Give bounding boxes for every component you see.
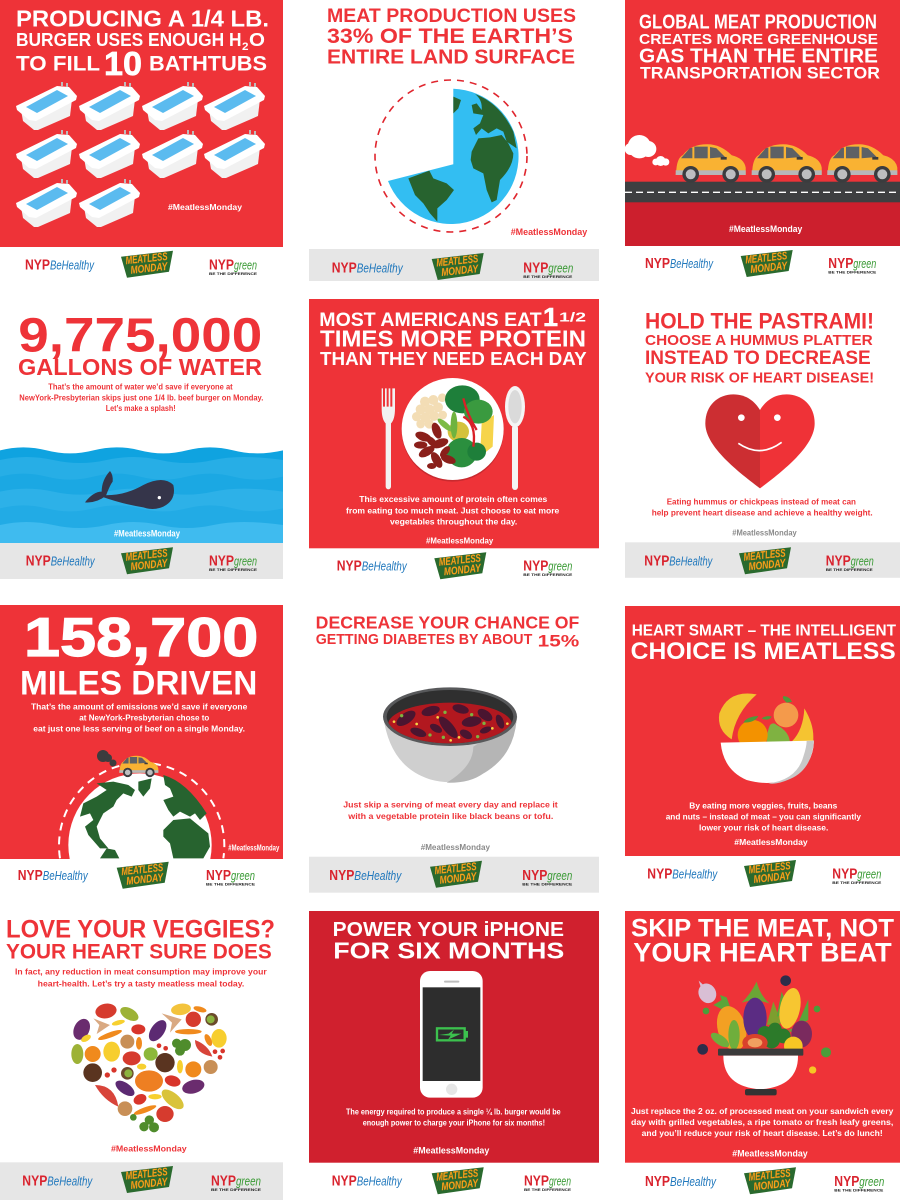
- logo: NYP green: NYP: [523, 260, 548, 277]
- logo: Meatless Monday: MEATLESS: [748, 860, 792, 876]
- logo band: [0, 543, 283, 579]
- hashtag: #MeatlessMonday: [732, 1149, 808, 1159]
- logo: Meatless Monday: MONDAY: [130, 557, 169, 573]
- panel: heart smart: [625, 606, 900, 887]
- logo: NYP BeHealthy: [26, 553, 95, 570]
- logo: NYP green: [523, 558, 572, 577]
- logo: Meatless Monday: [117, 862, 169, 889]
- logo: NYP green: NYP: [524, 1173, 549, 1190]
- heading: LOVE YOUR VEGGIES?: [6, 916, 275, 943]
- logo: NYP green: [209, 256, 257, 276]
- logo: Meatless Monday: MEATLESS: [745, 250, 788, 266]
- hashtag: #MeatlessMonday: [111, 1144, 187, 1154]
- logo: NYP green: green: [851, 555, 874, 569]
- heading: ENTIRE LAND SURFACE: [327, 46, 575, 68]
- body text: heart-health. Let’s try a tasty meatless meal today.: [38, 978, 244, 988]
- logo: NYP BeHealthy: NYP: [25, 256, 50, 274]
- body text: [631, 1106, 894, 1138]
- body text: Let’s make a splash!: [106, 403, 176, 413]
- logo: NYP green: BE THE DIFFERENCE: [206, 882, 255, 886]
- logo: NYP green: green: [234, 258, 257, 272]
- plate of food: [402, 378, 504, 482]
- logo: NYP green: [828, 255, 876, 274]
- logo: NYP BeHealthy: NYP: [22, 1172, 47, 1189]
- heading: [319, 302, 587, 369]
- logo: NYP green: [211, 1172, 261, 1192]
- logo: NYP BeHealthy: BeHealthy: [669, 555, 713, 569]
- logo: NYP BeHealthy: NYP: [645, 255, 670, 272]
- logo: NYP green: NYP: [522, 867, 547, 884]
- logo: Meatless Monday: MEATLESS: [121, 862, 164, 878]
- hashtag: #MeatlessMonday: [421, 842, 490, 852]
- logo: Meatless Monday: MONDAY: [126, 872, 165, 888]
- logo: Meatless Monday: MEATLESS: [125, 1166, 169, 1182]
- logo: NYP BeHealthy: [22, 1172, 93, 1189]
- logo: NYP green: green: [549, 1175, 571, 1189]
- logo: NYP green: [206, 867, 255, 886]
- logo: NYP BeHealthy: NYP: [332, 1173, 357, 1190]
- panel: gallons of water: [0, 310, 283, 579]
- body text: In fact, any reduction in meat consumption may improve your: [15, 967, 267, 977]
- heading: CHOICE IS MEATLESS: [631, 638, 896, 665]
- logo: NYP BeHealthy: [337, 558, 407, 575]
- logo: NYP green: BE THE DIFFERENCE: [523, 275, 572, 279]
- logo: NYP green: NYP: [834, 1173, 859, 1190]
- panel background: [0, 605, 283, 859]
- logo: NYP green: NYP: [826, 553, 851, 570]
- logo: NYP green: green: [859, 1175, 884, 1189]
- logo: Meatless Monday: [739, 547, 791, 574]
- bathtub pictogram grid: [16, 82, 265, 227]
- fruit bowl: [719, 693, 814, 784]
- body text: [19, 382, 263, 413]
- logo: Meatless Monday: MONDAY: [748, 557, 787, 573]
- logo: NYP BeHealthy: NYP: [644, 553, 669, 570]
- logo: NYP green: [834, 1173, 884, 1192]
- logo: NYP green: green: [853, 257, 876, 271]
- logo: NYP BeHealthy: NYP: [337, 558, 362, 575]
- logo: NYP green: BE THE DIFFERENCE: [826, 568, 873, 572]
- logo: NYP green: green: [236, 1174, 261, 1188]
- logo: Meatless Monday: [744, 860, 796, 887]
- logo: NYP BeHealthy: BeHealthy: [357, 1175, 402, 1189]
- logo: NYP BeHealthy: [329, 867, 402, 884]
- logo: Meatless Monday: MONDAY: [753, 870, 792, 886]
- logo: NYP green: green: [547, 869, 572, 883]
- logo: NYP green: BE THE DIFFERENCE: [211, 1188, 261, 1192]
- hashtag: #MeatlessMonday: [729, 224, 802, 234]
- logo: Meatless Monday: [430, 861, 482, 888]
- logo: Meatless Monday: MEATLESS: [434, 861, 478, 877]
- logo: Meatless Monday: MONDAY: [130, 1176, 169, 1192]
- logo: Meatless Monday: MEATLESS: [125, 251, 169, 267]
- heading: [645, 308, 874, 386]
- globe with dashed orbit: [58, 762, 226, 859]
- three cars: [676, 144, 897, 183]
- logo: NYP green: NYP: [523, 558, 548, 575]
- body text: day with grilled vegetables, a ripe tomato or fresh leafy greens,: [631, 1117, 893, 1127]
- logo: Meatless Monday: MONDAY: [441, 1177, 480, 1193]
- logo: NYP green: NYP: [209, 256, 234, 274]
- body text: [666, 800, 861, 833]
- logo: NYP BeHealthy: NYP: [329, 867, 354, 884]
- heading: CREATES MORE GREENHOUSE: [639, 31, 878, 48]
- heading: POWER YOUR iPHONE: [333, 918, 564, 941]
- heading: GAS THAN THE ENTIRE: [639, 46, 878, 68]
- heading: [316, 612, 580, 651]
- logo: NYP BeHealthy: NYP: [647, 866, 672, 883]
- logo: NYP green: BE THE DIFFERENCE: [832, 881, 881, 885]
- panel background: [0, 0, 283, 247]
- heading: THAN THEY NEED EACH DAY: [320, 349, 587, 369]
- body text: [346, 494, 560, 526]
- logo: NYP green: [523, 260, 573, 279]
- heading: FOR SIX MONTHS: [333, 937, 564, 963]
- ocean waves: [0, 447, 283, 543]
- logo: Meatless Monday: MEATLESS: [436, 1167, 479, 1184]
- logo: Meatless Monday: [121, 251, 173, 278]
- body text: Just replace the 2 oz. of processed meat on your sandwich every: [631, 1106, 894, 1116]
- hashtag: #MeatlessMonday: [413, 1146, 490, 1157]
- logo: Meatless Monday: [432, 253, 484, 280]
- logo: NYP green: [832, 866, 881, 885]
- heading: 1/2: [559, 310, 586, 325]
- heading: MILES DRIVEN: [20, 664, 257, 702]
- logo: Meatless Monday: [434, 552, 486, 579]
- logo: NYP BeHealthy: NYP: [332, 260, 357, 277]
- heading: 2: [242, 41, 248, 53]
- body text: eat just one less serving of beef on a single Monday.: [33, 723, 245, 733]
- logo: Meatless Monday: MONDAY: [130, 261, 169, 277]
- body text: [343, 799, 558, 821]
- logo: NYP green: BE THE DIFFERENCE: [522, 882, 572, 886]
- panel: skip the meat: [625, 911, 900, 1194]
- road and ground: [625, 182, 900, 246]
- logo: Meatless Monday: MEATLESS: [438, 552, 482, 569]
- logo: NYP green: BE THE DIFFERENCE: [828, 270, 876, 274]
- heading: MEAT PRODUCTION USES: [327, 6, 576, 27]
- phone with battery: [420, 971, 483, 1098]
- logo: NYP green: green: [231, 869, 255, 883]
- hashtag: #MeatlessMonday: [168, 202, 242, 212]
- body text: [15, 967, 267, 988]
- hashtag: #MeatlessMonday: [732, 528, 797, 538]
- heading: GETTING DIABETES BY ABOUT: [316, 631, 532, 648]
- body text: That’s the amount of water we’d save if everyone at: [48, 382, 233, 392]
- panel: bathtubs: [0, 0, 283, 278]
- heading: MOST AMERICANS EAT: [319, 309, 542, 331]
- logo: NYP BeHealthy: BeHealthy: [357, 262, 403, 276]
- logo: NYP green: NYP: [828, 255, 853, 272]
- heading: TRANSPORTATION SECTOR: [640, 65, 880, 83]
- panel: greenhouse gas: [625, 0, 900, 277]
- heading: PRODUCING A 1/4 LB.: [16, 6, 269, 32]
- panel: protein: [309, 299, 599, 579]
- panel background: [309, 299, 599, 548]
- heading: [631, 623, 897, 665]
- hashtag: #MeatlessMonday: [228, 843, 279, 853]
- hashtag: #MeatlessMonday: [114, 529, 180, 539]
- heading: [333, 918, 564, 963]
- heading: DECREASE YOUR CHANCE OF: [316, 612, 580, 632]
- logo: NYP BeHealthy: BeHealthy: [362, 560, 407, 574]
- body text: Just skip a serving of meat every day and replace it: [343, 799, 558, 809]
- logo: NYP BeHealthy: BeHealthy: [51, 555, 95, 569]
- logo: NYP BeHealthy: BeHealthy: [43, 869, 88, 883]
- body text: enough power to charge your iPhone for six months!: [363, 1118, 545, 1128]
- heading: [631, 915, 894, 968]
- smiling heart: [705, 394, 815, 488]
- logo: NYP BeHealthy: BeHealthy: [50, 258, 95, 272]
- logo: Meatless Monday: [744, 1167, 796, 1194]
- logo: Meatless Monday: [741, 250, 793, 277]
- panel: land surface: [309, 6, 599, 281]
- heading: HEART SMART – THE INTELLIGENT: [632, 623, 897, 640]
- body text: Eating hummus or chickpeas instead of meat can: [667, 496, 856, 506]
- logo: NYP green: [524, 1173, 571, 1192]
- heading: [6, 916, 275, 964]
- heading: BURGER USES ENOUGH H: [16, 30, 242, 50]
- logo: Meatless Monday: [121, 1166, 173, 1193]
- logo band: [0, 1162, 283, 1200]
- body text: from eating too much meat. Just choose to eat more: [346, 505, 560, 515]
- logo: NYP green: green: [548, 560, 572, 574]
- logo: NYP BeHealthy: [647, 866, 718, 883]
- logo: NYP green: BE THE DIFFERENCE: [523, 573, 572, 577]
- logo: Meatless Monday: MEATLESS: [436, 253, 479, 269]
- heading: [16, 6, 269, 82]
- logo: NYP BeHealthy: BeHealthy: [670, 1175, 717, 1189]
- body text: at NewYork-Presbyterian chose to: [79, 712, 209, 722]
- heading: 33% OF THE EARTH’S: [327, 25, 573, 48]
- body text: with a vegetable protein like black beans or tofu.: [347, 811, 553, 821]
- bowl of beans: [383, 687, 517, 783]
- heading: INSTEAD TO DECREASE: [645, 347, 871, 369]
- whale: [85, 471, 174, 509]
- logo: Meatless Monday: [432, 1167, 484, 1194]
- car with smoke: [97, 750, 158, 777]
- logo: NYP BeHealthy: BeHealthy: [354, 869, 402, 883]
- logo: Meatless Monday: MONDAY: [439, 871, 478, 887]
- body text: By eating more veggies, fruits, beans: [689, 800, 838, 810]
- logo: NYP BeHealthy: [332, 260, 403, 277]
- logo: Meatless Monday: MONDAY: [750, 260, 789, 276]
- body text: NewYork-Presbyterian skips just one 1/4 lb. beef burger on Monday.: [19, 392, 263, 402]
- logo: NYP BeHealthy: BeHealthy: [672, 868, 718, 882]
- logo band: [625, 542, 900, 578]
- panel: iPhone: [309, 911, 599, 1194]
- heading: TO FILL: [16, 52, 100, 76]
- body text: and you’ll reduce your risk of heart disease. Let’s do lunch!: [642, 1128, 883, 1138]
- logo: NYP green: [209, 553, 257, 572]
- logo: NYP green: NYP: [832, 866, 857, 883]
- heading: O: [249, 30, 265, 50]
- logo: Meatless Monday: MONDAY: [443, 562, 483, 578]
- heading: YOUR HEART SURE DOES: [6, 941, 272, 964]
- logo: NYP green: [826, 553, 874, 572]
- heading: TIMES MORE PROTEIN: [320, 326, 586, 352]
- heading: 10: [104, 45, 142, 82]
- heading: YOUR RISK OF HEART DISEASE!: [645, 369, 874, 386]
- panel background: [309, 911, 599, 1163]
- logo: NYP green: BE THE DIFFERENCE: [209, 568, 257, 572]
- logo: NYP green: [522, 867, 572, 886]
- logo: NYP BeHealthy: NYP: [645, 1173, 670, 1190]
- logo: Meatless Monday: MONDAY: [753, 1177, 792, 1193]
- panel: diabetes: [309, 612, 599, 893]
- panel: miles driven: [0, 605, 283, 917]
- logo: NYP green: green: [234, 555, 257, 569]
- logo: NYP BeHealthy: [25, 256, 95, 274]
- heart made of vegetables: [70, 1002, 227, 1132]
- heading: [327, 6, 576, 68]
- exhaust clouds: [625, 135, 669, 166]
- logo: NYP green: NYP: [209, 553, 234, 570]
- logo: NYP BeHealthy: [18, 867, 88, 884]
- heading: HOLD THE PASTRAMI!: [645, 308, 874, 333]
- logo: Meatless Monday: MONDAY: [441, 263, 480, 279]
- heading: GALLONS OF WATER: [18, 354, 262, 380]
- panel: love your veggies: [0, 916, 283, 1200]
- heading: [639, 12, 880, 83]
- logo band: [309, 857, 599, 893]
- body text: lower your risk of heart disease.: [699, 823, 828, 833]
- logo: NYP BeHealthy: [645, 255, 714, 272]
- big number: 9,775,000: [18, 310, 262, 363]
- heading: YOUR HEART BEAT: [633, 938, 892, 968]
- hashtag: #MeatlessMonday: [511, 227, 587, 237]
- logo: NYP green: NYP: [211, 1172, 236, 1189]
- hashtag: #MeatlessMonday: [734, 837, 808, 847]
- body text: The energy required to produce a single ¼ lb. burger would be: [346, 1107, 561, 1117]
- logo: NYP BeHealthy: [644, 553, 713, 570]
- fork: [382, 388, 395, 489]
- logo: NYP BeHealthy: BeHealthy: [670, 257, 714, 271]
- logo band: [309, 249, 599, 281]
- logo: Meatless Monday: MEATLESS: [125, 547, 169, 564]
- panel background: [625, 911, 900, 1163]
- body text: [31, 701, 248, 733]
- hashtag: #MeatlessMonday: [426, 535, 494, 545]
- logo: Meatless Monday: MEATLESS: [748, 1167, 792, 1184]
- logo: Meatless Monday: MEATLESS: [743, 547, 787, 564]
- heading: CHOOSE A HUMMUS PLATTER: [645, 332, 873, 349]
- panel background: [625, 606, 900, 856]
- heading: 1: [543, 302, 558, 332]
- body text: vegetables throughout the day.: [390, 516, 517, 526]
- heading: 15%: [538, 632, 579, 651]
- globe pie chart with missing third: [375, 80, 527, 232]
- body text: This excessive amount of protein often comes: [359, 494, 548, 504]
- logo: NYP BeHealthy: NYP: [26, 553, 51, 570]
- logo: NYP BeHealthy: BeHealthy: [47, 1174, 93, 1188]
- logo: NYP green: BE THE DIFFERENCE: [209, 272, 257, 276]
- logo: NYP green: BE THE DIFFERENCE: [834, 1188, 883, 1192]
- logo: NYP BeHealthy: NYP: [18, 867, 43, 884]
- spoon: [505, 386, 525, 490]
- logo: NYP green: green: [857, 868, 881, 882]
- logo: NYP BeHealthy: [332, 1173, 402, 1190]
- panel background: [625, 0, 900, 246]
- heading: BATHTUBS: [149, 52, 267, 76]
- logo: NYP green: BE THE DIFFERENCE: [524, 1188, 571, 1192]
- logo: NYP green: green: [548, 262, 573, 276]
- body text: and nuts – instead of meat – you can significantly: [666, 811, 861, 821]
- panel: hold the pastrami: [625, 308, 900, 578]
- logo: NYP BeHealthy: [645, 1173, 717, 1190]
- vegetable bowl: [695, 975, 831, 1095]
- body text: That’s the amount of emissions we’d save if everyone: [31, 701, 248, 711]
- body text: help prevent heart disease and achieve a healthy weight.: [652, 507, 873, 517]
- logo: NYP green: NYP: [206, 867, 231, 884]
- body text: [346, 1107, 561, 1128]
- logo: Meatless Monday: [121, 547, 173, 574]
- heading: SKIP THE MEAT, NOT: [631, 915, 894, 943]
- big number: 158,700: [24, 606, 258, 668]
- body text: [652, 496, 873, 517]
